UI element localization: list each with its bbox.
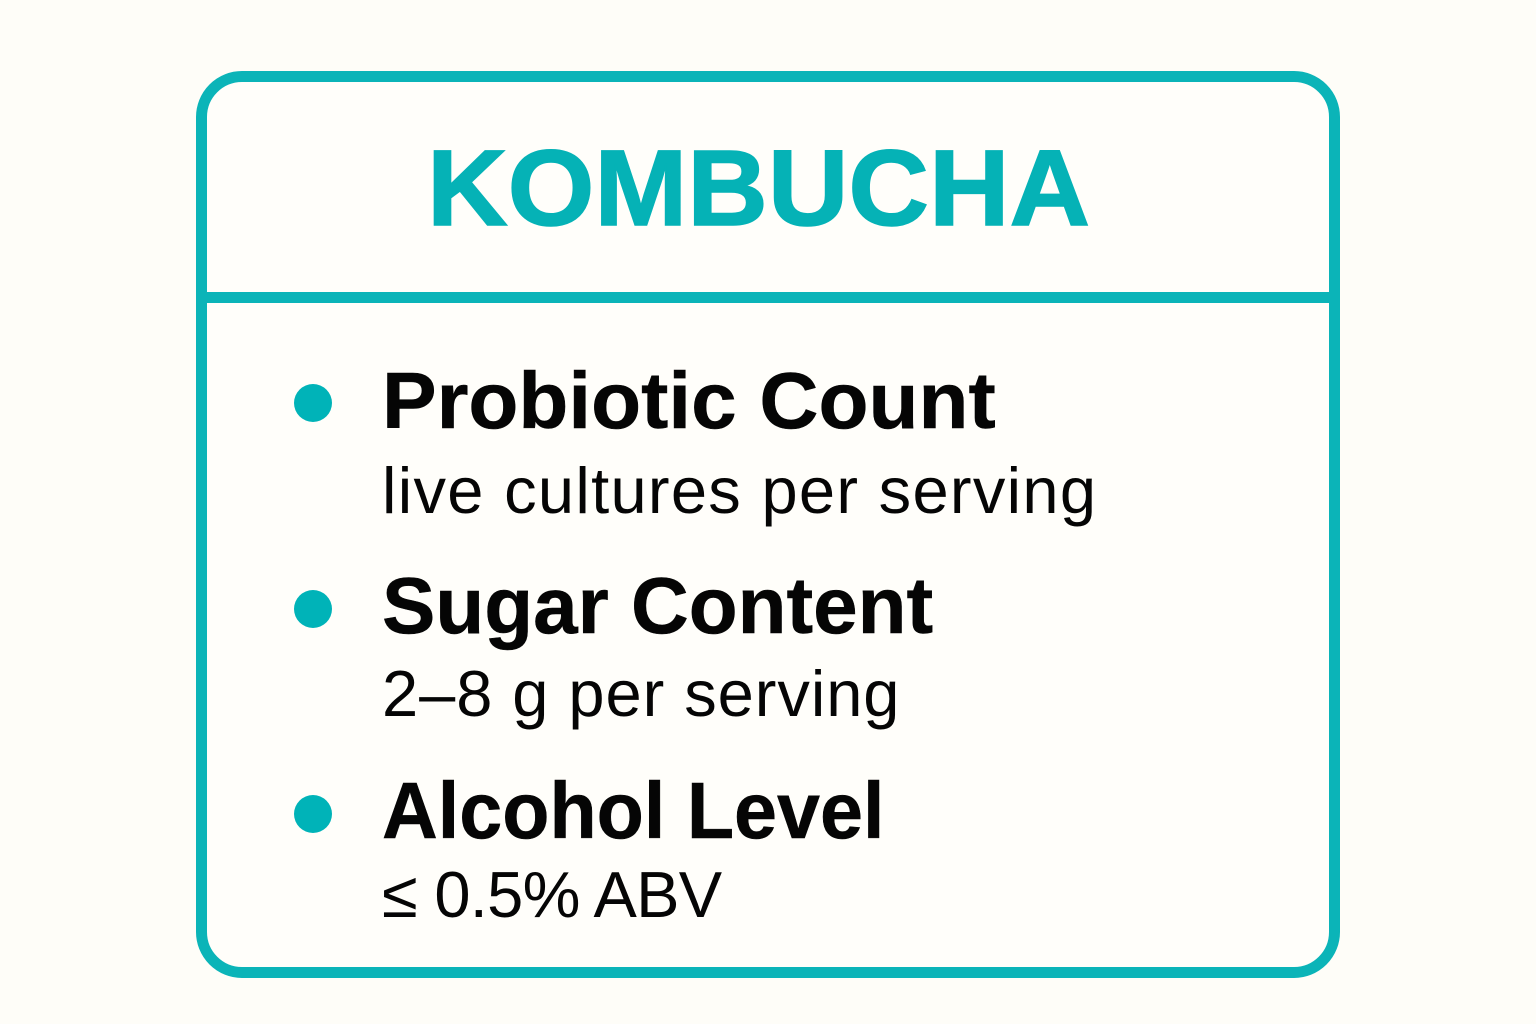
icon: bullet 1 <box>294 384 332 422</box>
icon: bullet 3 <box>294 795 332 833</box>
heading: Sugar Content: Sugar Content <box>382 561 933 650</box>
heading: Alcohol Level: Alcohol Level <box>382 766 884 855</box>
divider <box>200 292 1336 303</box>
icon: bullet 2 <box>294 590 332 628</box>
title: KOMBUCHA <box>427 127 1090 248</box>
panel: kombucha card <box>196 71 1340 978</box>
heading: Probiotic Count: Probiotic Count <box>382 356 996 445</box>
text: alcohol amount: ≤ 0.5% ABV <box>382 858 721 931</box>
text: live cultures: live cultures per serving <box>382 454 1097 527</box>
text: sugar amount: 2–8 g per serving <box>382 657 900 730</box>
